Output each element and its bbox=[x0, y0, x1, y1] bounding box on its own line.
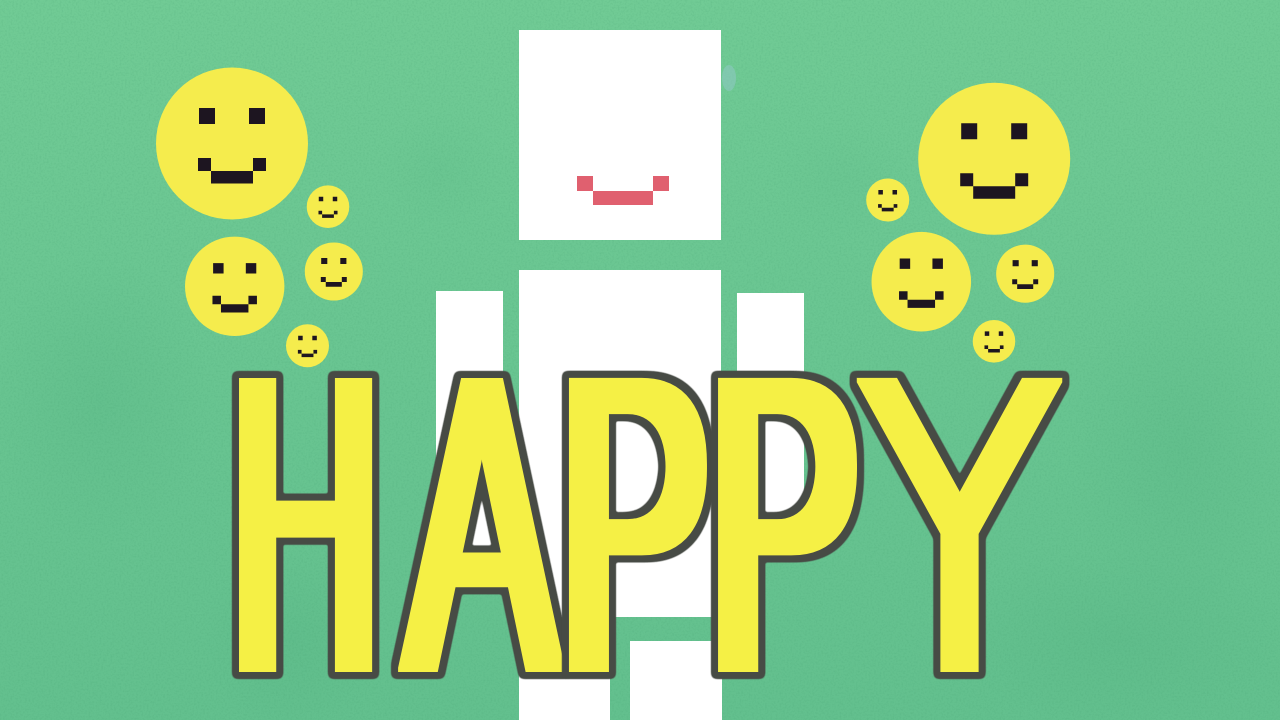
character mouth: pink pixel smile bbox=[577, 176, 669, 205]
smiley: right small top bbox=[866, 178, 909, 222]
smiley: left small bottom bbox=[286, 324, 329, 367]
title: HAPPY bbox=[231, 288, 1063, 720]
smiley: right small bottom bbox=[973, 320, 1015, 363]
smiley: left medium bbox=[185, 237, 284, 336]
smileys: right cluster bbox=[866, 83, 1070, 363]
left arm bbox=[436, 291, 503, 561]
smileys: left cluster bbox=[156, 68, 363, 367]
character: white pixel figure bbox=[436, 30, 804, 720]
smiley: left small top bbox=[307, 185, 349, 228]
smiley: left small middle bbox=[305, 242, 363, 301]
smiley: left large bbox=[156, 68, 308, 220]
head bbox=[519, 30, 721, 240]
right leg bbox=[630, 641, 722, 720]
smiley: right small middle bbox=[996, 245, 1054, 303]
left leg bbox=[519, 641, 610, 720]
smiley: right large bbox=[918, 83, 1070, 235]
right arm bbox=[737, 293, 804, 548]
torso bbox=[519, 270, 721, 617]
smiley: right medium bbox=[872, 232, 971, 331]
